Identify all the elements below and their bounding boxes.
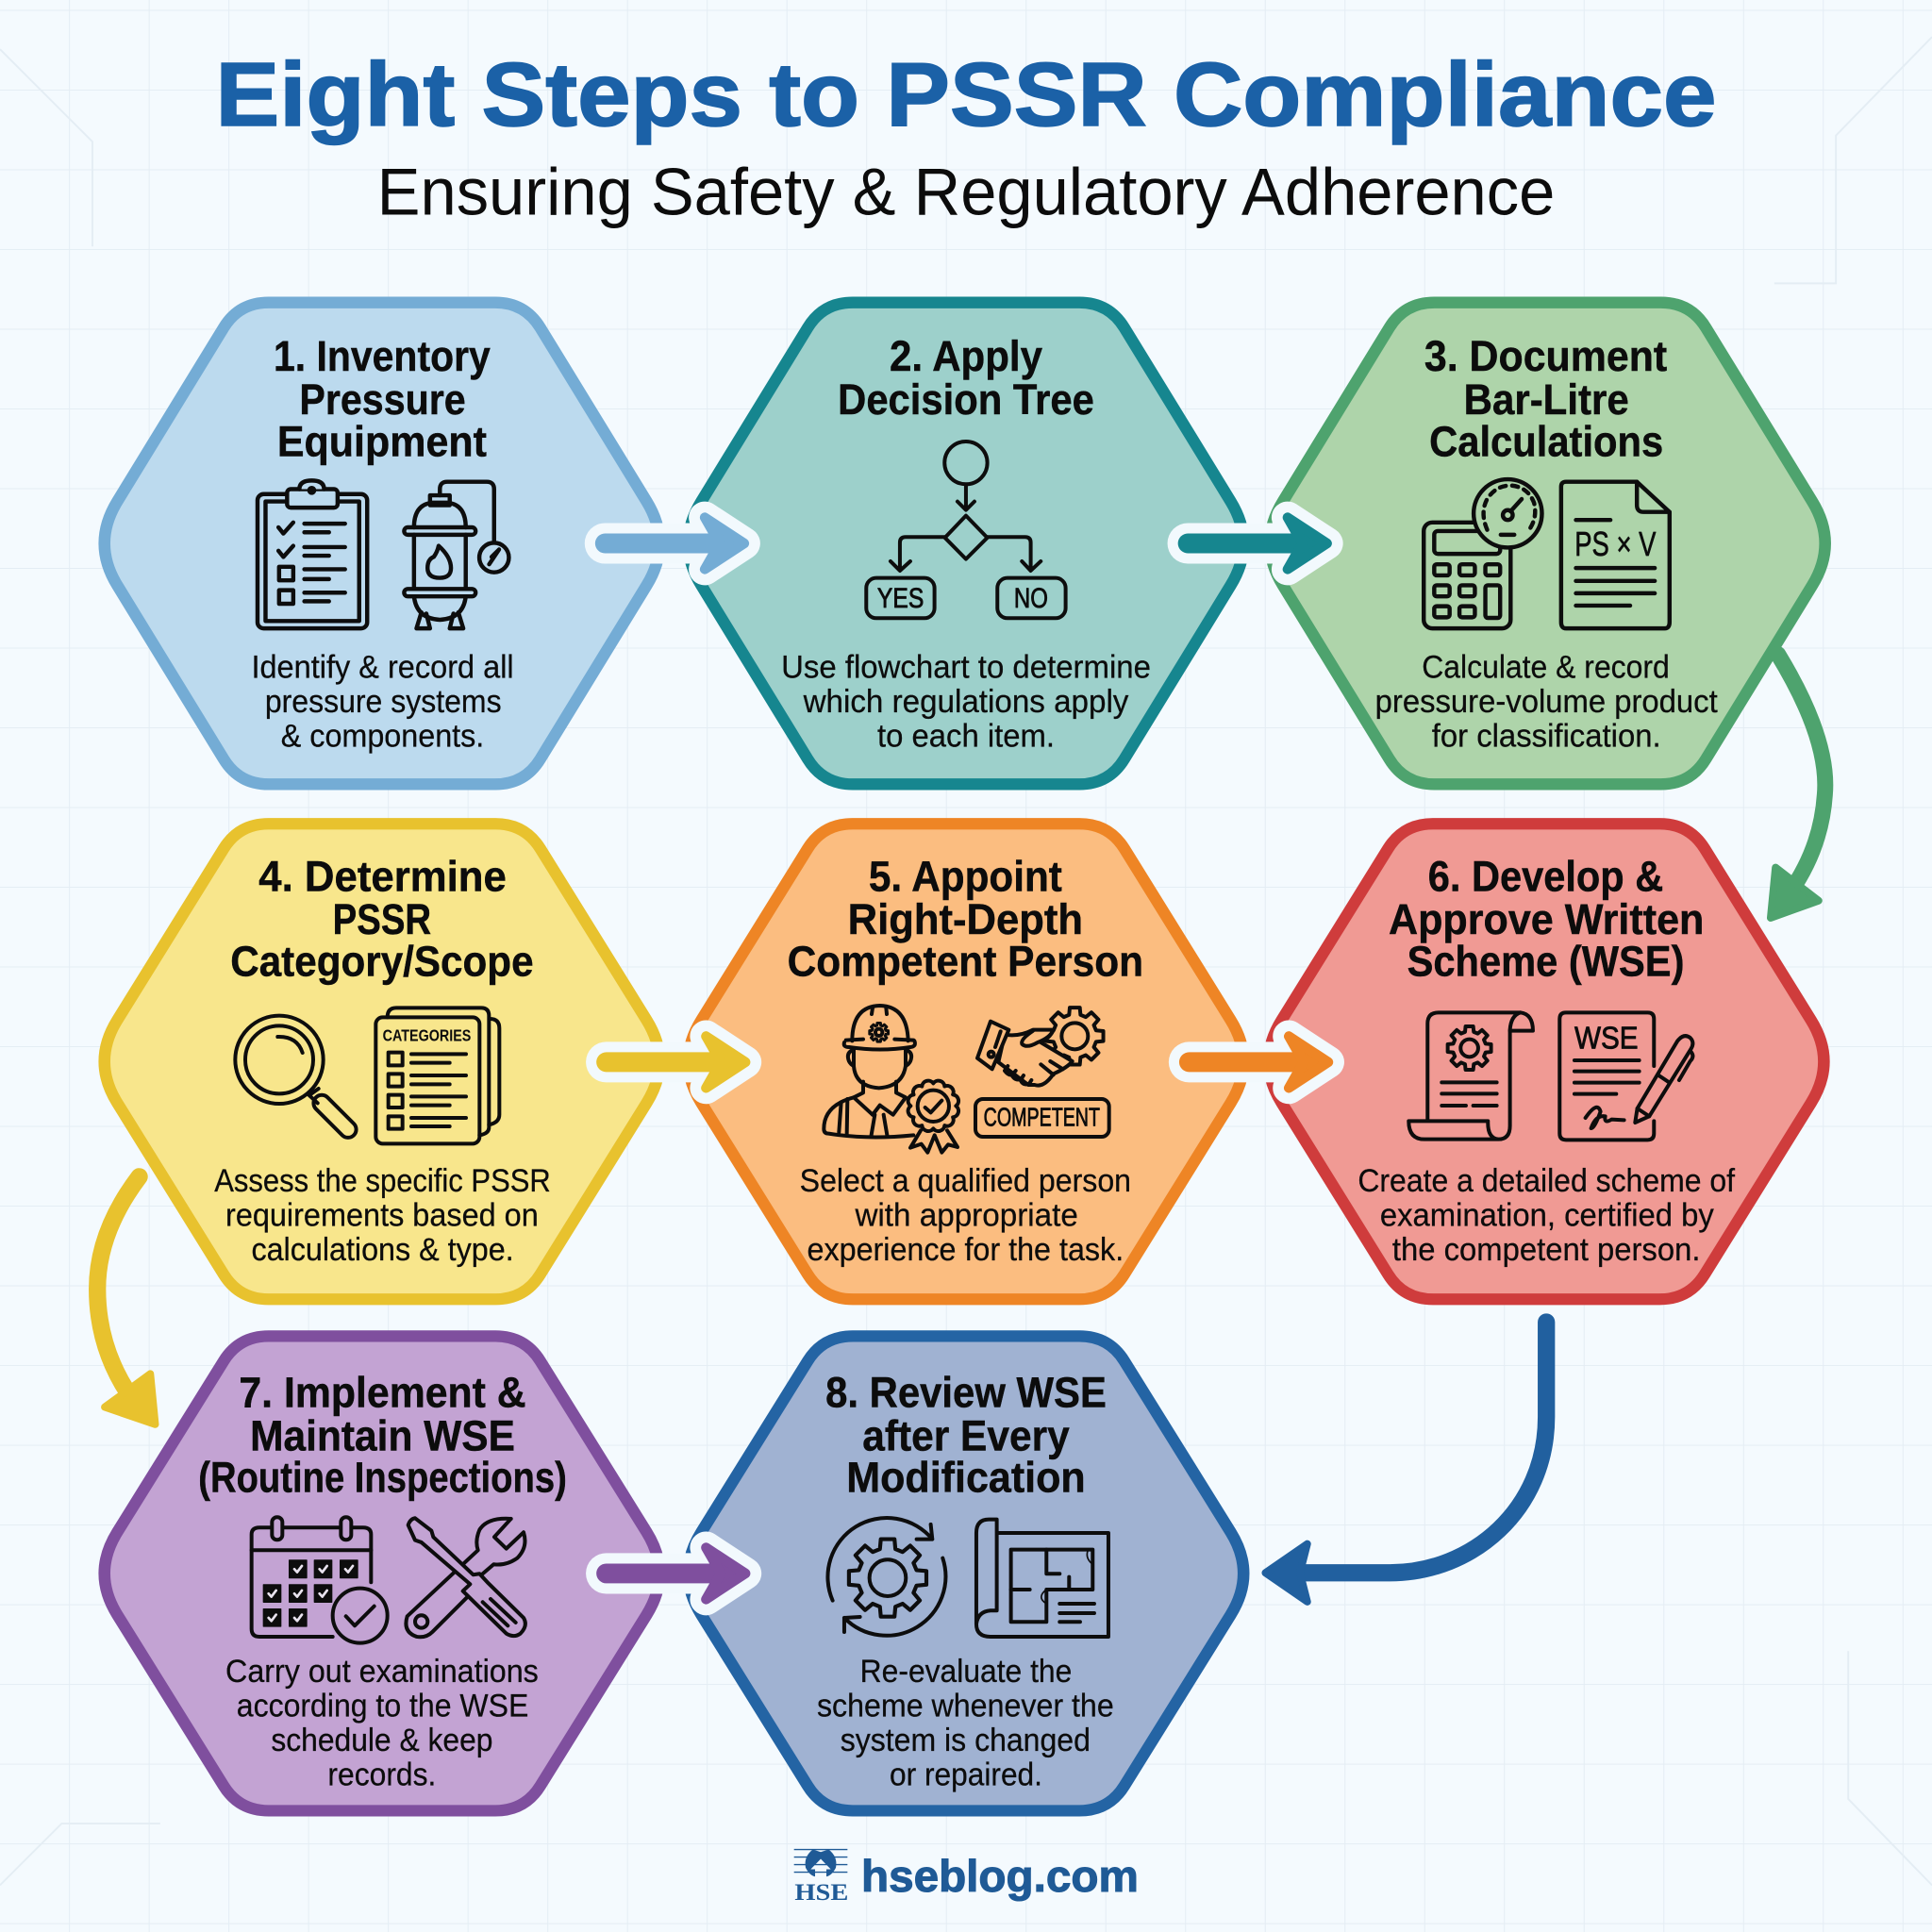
description 2 <box>781 649 1151 755</box>
heading 3: Calculations <box>1429 417 1663 465</box>
description 8: or repaired. <box>890 1757 1042 1793</box>
panel: step 1 <box>105 303 659 784</box>
hexagon 5 <box>689 824 1243 1299</box>
heading 1: Equipment <box>277 417 487 465</box>
arrow: step 4 to 7 <box>97 1176 156 1424</box>
heading 8 <box>825 1369 1107 1502</box>
heading 5: Right-Depth <box>848 895 1083 943</box>
description 8: system is changed <box>841 1723 1091 1758</box>
heading 6 <box>1389 852 1704 985</box>
heading 7: (Routine Inspections) <box>198 1454 567 1502</box>
icon: decision flowchart: NO <box>1014 583 1048 614</box>
heading 2: Decision Tree <box>838 375 1094 424</box>
heading 1 <box>274 332 491 465</box>
heading 7 <box>198 1369 567 1502</box>
arrow: step 3 to 6 <box>1771 655 1825 918</box>
icon: decision flowchart: YES <box>877 583 924 614</box>
icon: handshake with gear and competent badge: COMPETENT <box>984 1102 1100 1131</box>
description 5: Select a qualified person <box>800 1163 1131 1199</box>
description 4: calculations & type. <box>251 1232 514 1268</box>
heading 5: Competent Person <box>788 937 1143 985</box>
heading 2: 2. Apply <box>890 332 1043 380</box>
description 7: according to the WSE <box>237 1688 528 1724</box>
panel: step 7 <box>105 1336 659 1810</box>
icon: calendar with check <box>252 1517 388 1643</box>
icon: scroll with gear <box>1408 1012 1533 1140</box>
description 1 <box>251 649 514 755</box>
icon: decision flowchart <box>866 441 1066 618</box>
heading 3 <box>1424 332 1667 465</box>
description 5 <box>800 1163 1131 1268</box>
description 8: scheme whenever the <box>817 1688 1114 1724</box>
description 6: the competent person. <box>1392 1232 1700 1268</box>
icon: handshake with gear and competent badge <box>975 1008 1109 1137</box>
description 5: with appropriate <box>854 1198 1078 1234</box>
description 4 <box>214 1163 551 1268</box>
icon: PS x V document: PS × V <box>1574 525 1657 563</box>
description 3 <box>1375 649 1718 755</box>
heading 4: PSSR <box>333 895 431 943</box>
description 1: pressure systems <box>265 684 502 720</box>
icon: floor plan blueprint <box>976 1520 1108 1637</box>
heading 3: Bar-Litre <box>1464 375 1629 424</box>
heading 5: 5. Appoint <box>869 852 1062 900</box>
heading 8: after Every <box>862 1411 1070 1459</box>
hexagon 6 <box>1269 824 1824 1299</box>
description 2: which regulations apply <box>803 684 1128 720</box>
icon: categories document: CATEGORIES <box>383 1025 471 1044</box>
description 1: Identify & record all <box>251 649 514 685</box>
panel: step 5 <box>689 824 1243 1299</box>
description 7 <box>225 1654 539 1793</box>
icon: WSE document with pen: WSE <box>1574 1022 1639 1057</box>
footer logo and site name <box>794 1850 1139 1906</box>
arrow: step 6 to 8 <box>1265 1322 1546 1602</box>
description 5: experience for the task. <box>808 1232 1124 1268</box>
heading 3: 3. Document <box>1424 332 1667 380</box>
description 8: Re-evaluate the <box>860 1654 1072 1690</box>
icon: HSE logo <box>794 1850 848 1906</box>
heading 4: 4. Determine <box>258 852 507 900</box>
arrow: step 7 to 8 <box>607 1547 745 1599</box>
description 2: to each item. <box>877 719 1055 755</box>
heading 7: 7. Implement & <box>239 1369 526 1417</box>
description 4: requirements based on <box>225 1198 539 1234</box>
description 7: Carry out examinations <box>225 1654 539 1690</box>
icon: PS x V document <box>1561 482 1670 628</box>
hexagon 2 <box>689 303 1243 784</box>
description 6 <box>1357 1163 1736 1268</box>
subtitle: Ensuring Safety & Regulatory Adherence <box>377 154 1555 228</box>
heading 6: 6. Develop & <box>1428 852 1663 900</box>
icon: pressure vessel with gauge <box>404 482 508 628</box>
heading 7: Maintain WSE <box>250 1411 515 1459</box>
description 2: Use flowchart to determine <box>781 649 1151 685</box>
panel: step 4 <box>105 824 659 1299</box>
heading 1: 1. Inventory <box>274 332 491 380</box>
hexagon 3 <box>1270 303 1825 784</box>
hexagon 1 <box>105 303 659 784</box>
hexagon 7 <box>105 1336 659 1810</box>
heading 8: 8. Review WSE <box>825 1369 1107 1417</box>
icon: magnifier <box>235 1016 359 1141</box>
heading 5 <box>788 852 1143 985</box>
description 1: & components. <box>281 719 484 755</box>
description 3: for classification. <box>1432 719 1661 755</box>
icon: crossed spanner and screwdriver <box>406 1518 525 1637</box>
arrow: step 2 to 3 <box>1188 518 1327 569</box>
arrow: step 4 to 5 <box>607 1036 745 1088</box>
heading 6: Approve Written <box>1389 895 1704 943</box>
description 7: schedule & keep <box>271 1723 492 1758</box>
hexagon 8 <box>689 1336 1243 1810</box>
icon: WSE document with pen <box>1559 1012 1692 1140</box>
description 6: examination, certified by <box>1380 1198 1714 1234</box>
title: Eight Steps to PSSR Compliance <box>216 45 1716 145</box>
panel: step 3 <box>1270 303 1825 784</box>
description 6: Create a detailed scheme of <box>1357 1163 1736 1199</box>
description 4: Assess the specific PSSR <box>214 1163 551 1199</box>
heading 8: Modification <box>846 1454 1086 1502</box>
icon: calculator with gauge <box>1424 479 1541 628</box>
heading 1: Pressure <box>299 375 466 424</box>
icon: gear with cycle arrows <box>827 1518 945 1636</box>
icon: engineer with rosette <box>824 1006 958 1153</box>
panel: step 6 <box>1269 824 1824 1299</box>
icon: clipboard checklist <box>258 480 367 628</box>
panel: step 8 <box>689 1336 1243 1810</box>
heading 6: Scheme (WSE) <box>1407 937 1684 985</box>
site name: hseblog.com <box>861 1851 1139 1901</box>
arrow: step 5 to 6 <box>1189 1036 1328 1088</box>
description 7: records. <box>327 1757 436 1793</box>
description 3: pressure-volume product <box>1375 684 1718 720</box>
panel: step 2 <box>689 303 1243 784</box>
icon: categories document <box>375 1008 499 1143</box>
heading 2 <box>838 332 1094 424</box>
heading 4 <box>230 852 534 985</box>
heading 4: Category/Scope <box>230 937 534 985</box>
arrow: step 1 to 2 <box>605 518 744 569</box>
description 8 <box>817 1654 1114 1793</box>
description 3: Calculate & record <box>1422 649 1670 685</box>
hexagon 4 <box>105 824 659 1299</box>
icon: HSE logo: HSE <box>794 1879 848 1906</box>
